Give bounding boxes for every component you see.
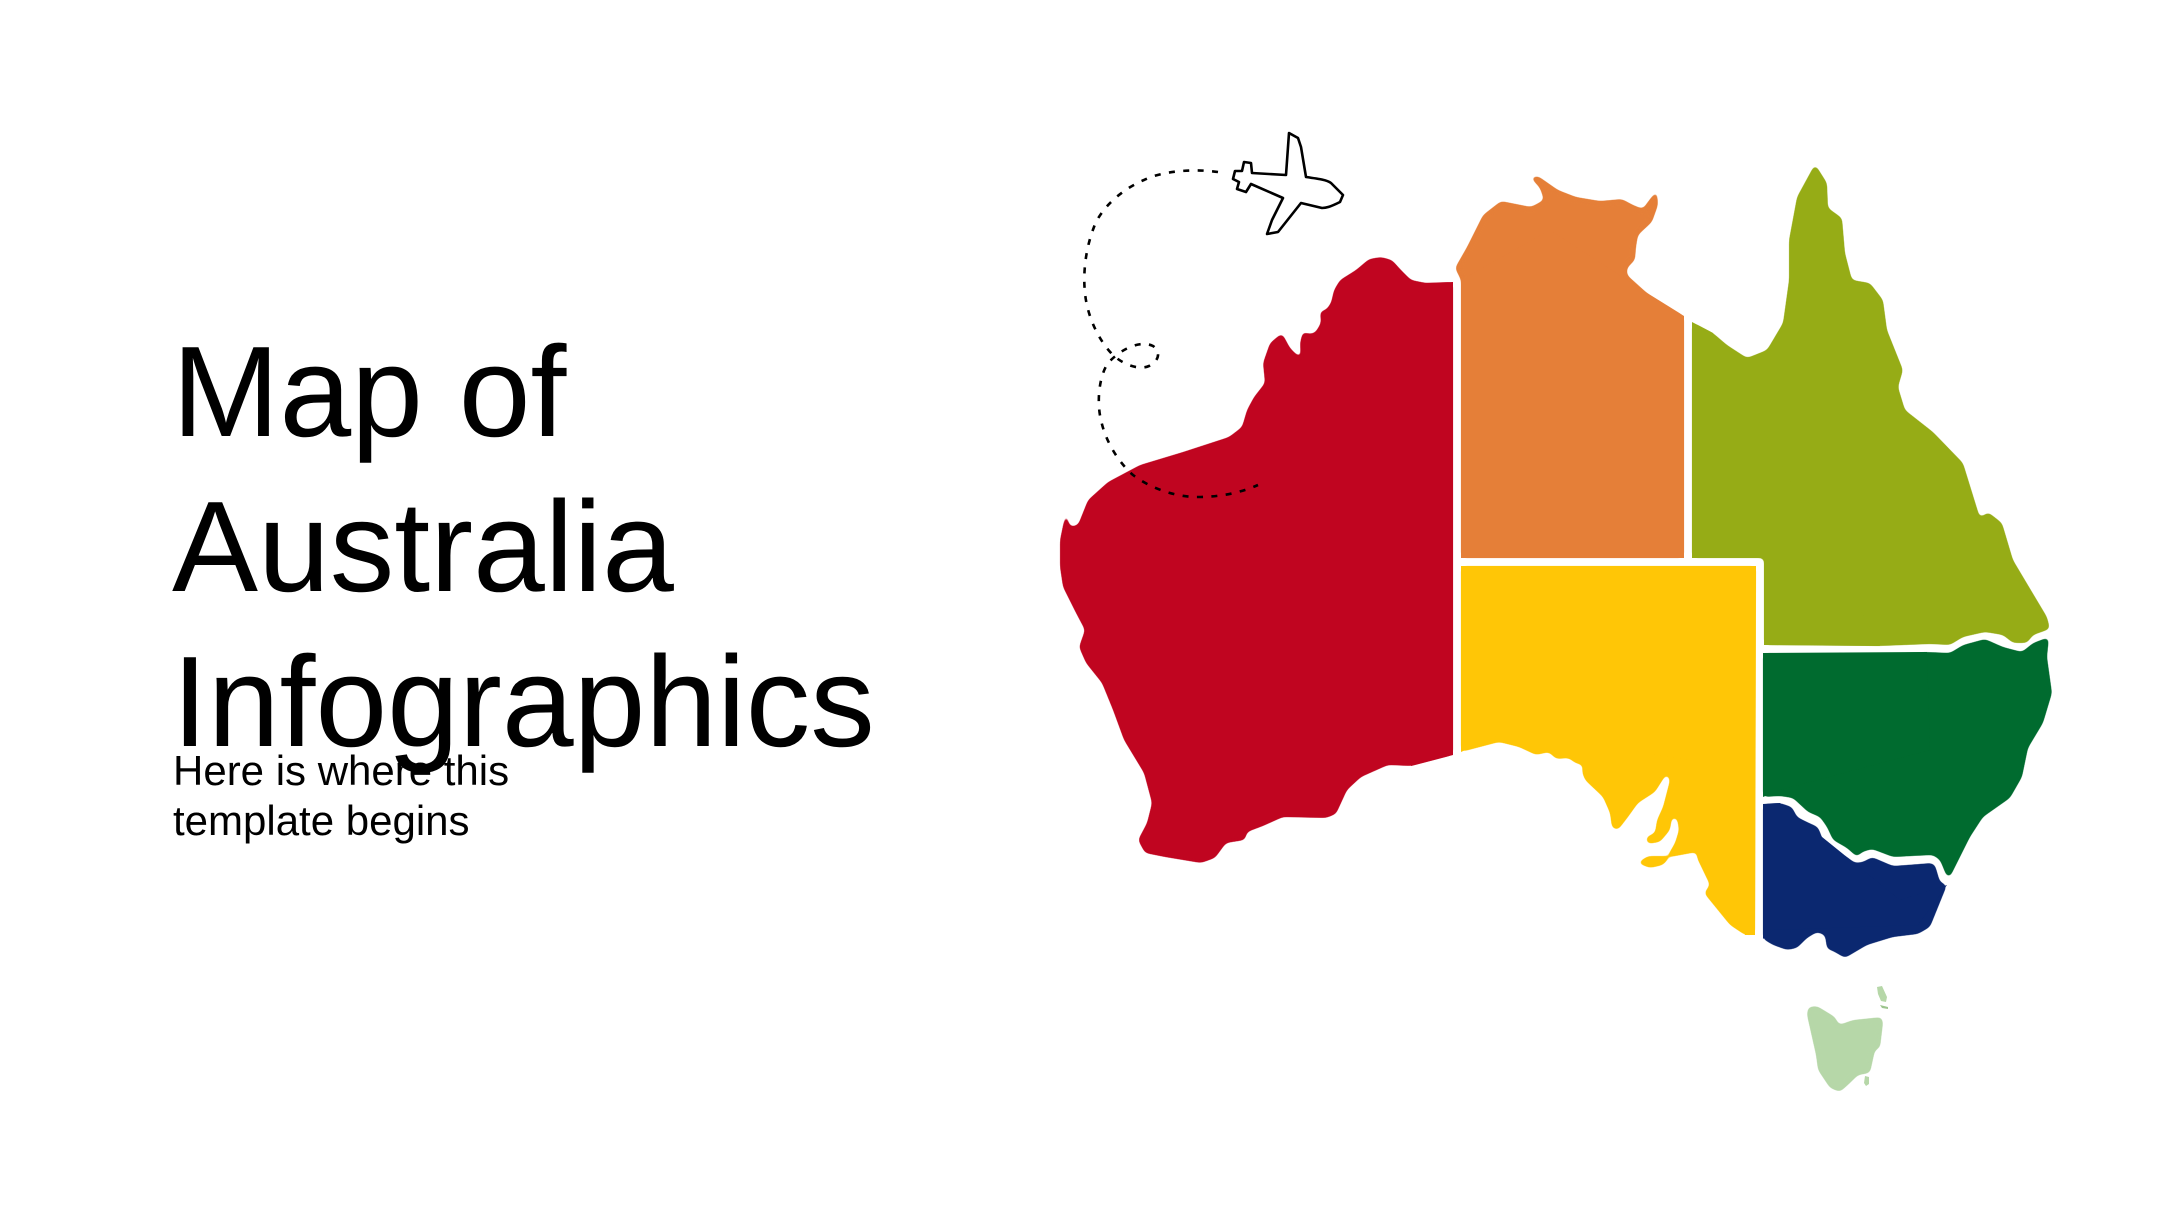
dashed flight path — [1084, 170, 1258, 497]
subtitle text — [173, 747, 509, 844]
region: Tasmania — [1807, 1006, 1883, 1092]
map of Australia — [1060, 164, 2052, 1092]
title: Australia — [172, 475, 674, 619]
subtitle text: template begins — [173, 797, 470, 844]
region: Victoria — [1763, 803, 1947, 958]
title — [172, 320, 875, 774]
region: New South Wales — [1763, 637, 2052, 877]
title: Infographics — [172, 630, 875, 774]
island sliver — [1880, 1005, 1888, 1009]
title: Map of — [172, 320, 566, 464]
island: Flinders — [1877, 986, 1887, 1002]
region: Western Australia — [1060, 257, 1453, 863]
icon: airplane — [1233, 133, 1343, 234]
region: Northern Territory — [1455, 176, 1684, 558]
region: South Australia — [1461, 566, 1756, 935]
region: Queensland — [1692, 164, 2050, 646]
island: Bruny — [1864, 1076, 1869, 1086]
subtitle text: Here is where this — [173, 747, 509, 794]
